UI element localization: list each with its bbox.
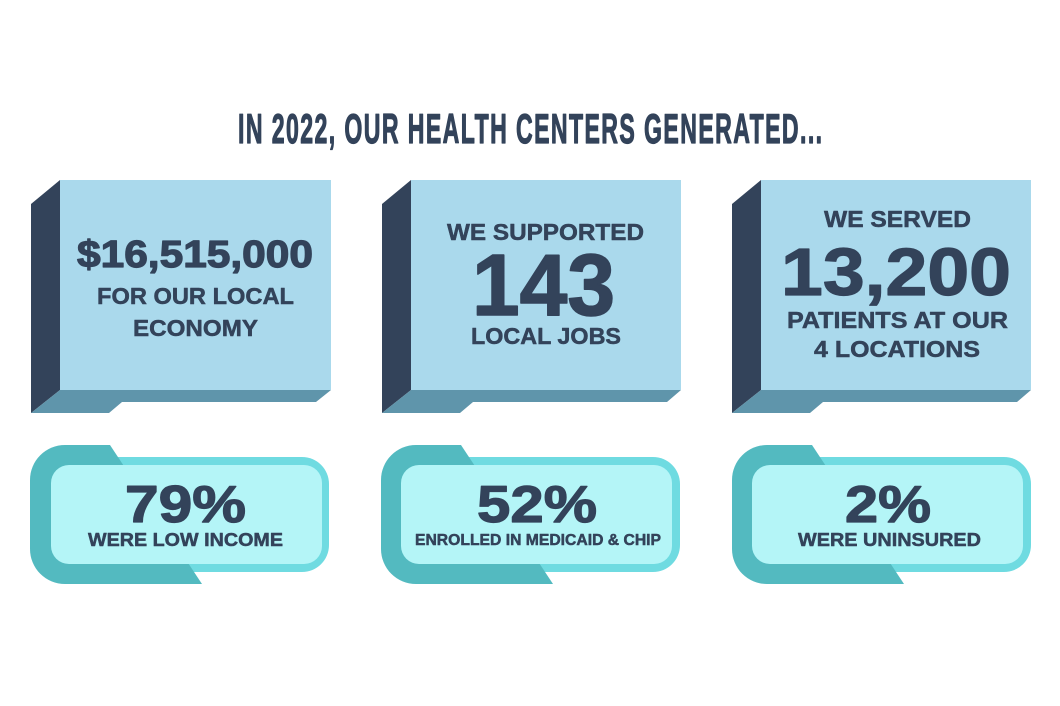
medicaid label: ENROLLED IN MEDICAID & CHIP [415,532,661,549]
card bottom side [31,390,331,413]
patients number: 13,200 [781,235,1011,310]
panel: local jobs [382,180,681,413]
low income label: WERE LOW INCOME [88,529,283,550]
badge face [752,465,1023,564]
card face [60,180,331,390]
jobs label: LOCAL JOBS [471,323,621,349]
economy label: FOR OUR LOCAL [97,283,294,309]
jobs number: 143 [472,237,615,334]
panel: uninsured [732,445,1031,584]
card bottom side [732,390,1031,413]
panel: medicaid and chip [381,445,680,584]
economy amount: $16,515,000 [77,234,313,276]
title: IN 2022, OUR HEALTH CENTERS GENERATED... [238,106,822,153]
card left side [382,180,411,413]
jobs intro: WE SUPPORTED [447,219,644,245]
panel: low income [30,445,329,584]
card face [761,180,1031,390]
badge border [411,457,680,572]
patients label [787,307,1008,362]
card left side [732,180,761,413]
medicaid percent: 52% [477,476,597,534]
patients label: PATIENTS AT OUR [787,307,1008,333]
low income percent: 79% [125,476,246,534]
uninsured percent: 2% [845,476,931,534]
badge dark tab [381,445,553,584]
patients label: 4 LOCATIONS [814,336,980,362]
card face [411,180,681,390]
card left side [31,180,60,413]
badge border [60,457,329,572]
badge face [401,465,672,564]
patients intro: WE SERVED [824,206,971,232]
card bottom side [382,390,681,413]
economy label: ECONOMY [133,315,258,341]
badge face [51,465,322,564]
uninsured label: WERE UNINSURED [798,529,981,550]
economy label [97,283,294,341]
badge dark tab [732,445,904,584]
panel: patients served [732,180,1031,413]
badge border [762,457,1031,572]
badge dark tab [30,445,202,584]
panel: local economy [31,180,331,413]
